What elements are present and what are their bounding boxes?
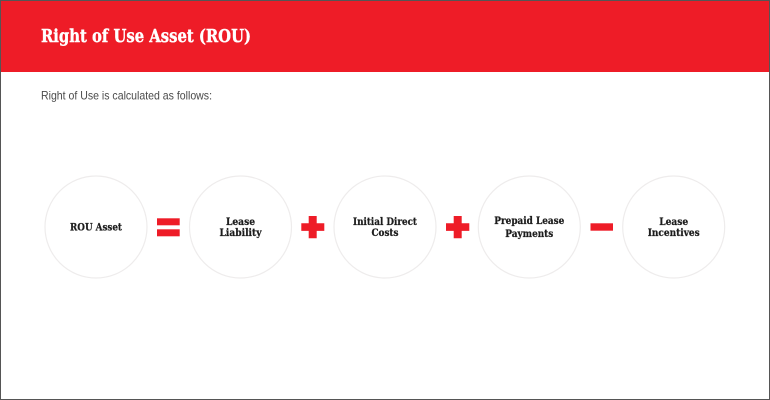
circle: Lease Liability: Lease [226,216,255,228]
circle: ROU Asset [45,176,147,278]
operator: minus [590,223,613,231]
circle: Initial Direct Costs: Costs [372,227,399,239]
operator: plus [446,216,469,238]
header banner [1,1,769,72]
circle: Prepaid Lease Payments: Prepaid Lease [494,215,565,227]
circle: Prepaid Lease Payments: Payments [505,228,554,240]
circle: Lease Liability: Liability [220,227,262,239]
circle: Lease Liability [190,176,292,278]
circle: Lease Incentives: Incentives [648,227,700,239]
intro text: Right of Use is calculated as follows: [41,88,212,102]
circle: Prepaid Lease Payments [478,176,580,278]
circle: Initial Direct Costs [334,176,436,278]
circle: Initial Direct Costs: Initial Direct [353,216,417,228]
circle: Lease Incentives [623,176,725,278]
operator: equals [157,218,180,236]
operator: plus [301,216,324,238]
title: Right of Use Asset (ROU) [41,27,251,47]
circle: Lease Incentives: Lease [659,216,689,228]
circle: ROU Asset: ROU Asset [70,222,122,234]
